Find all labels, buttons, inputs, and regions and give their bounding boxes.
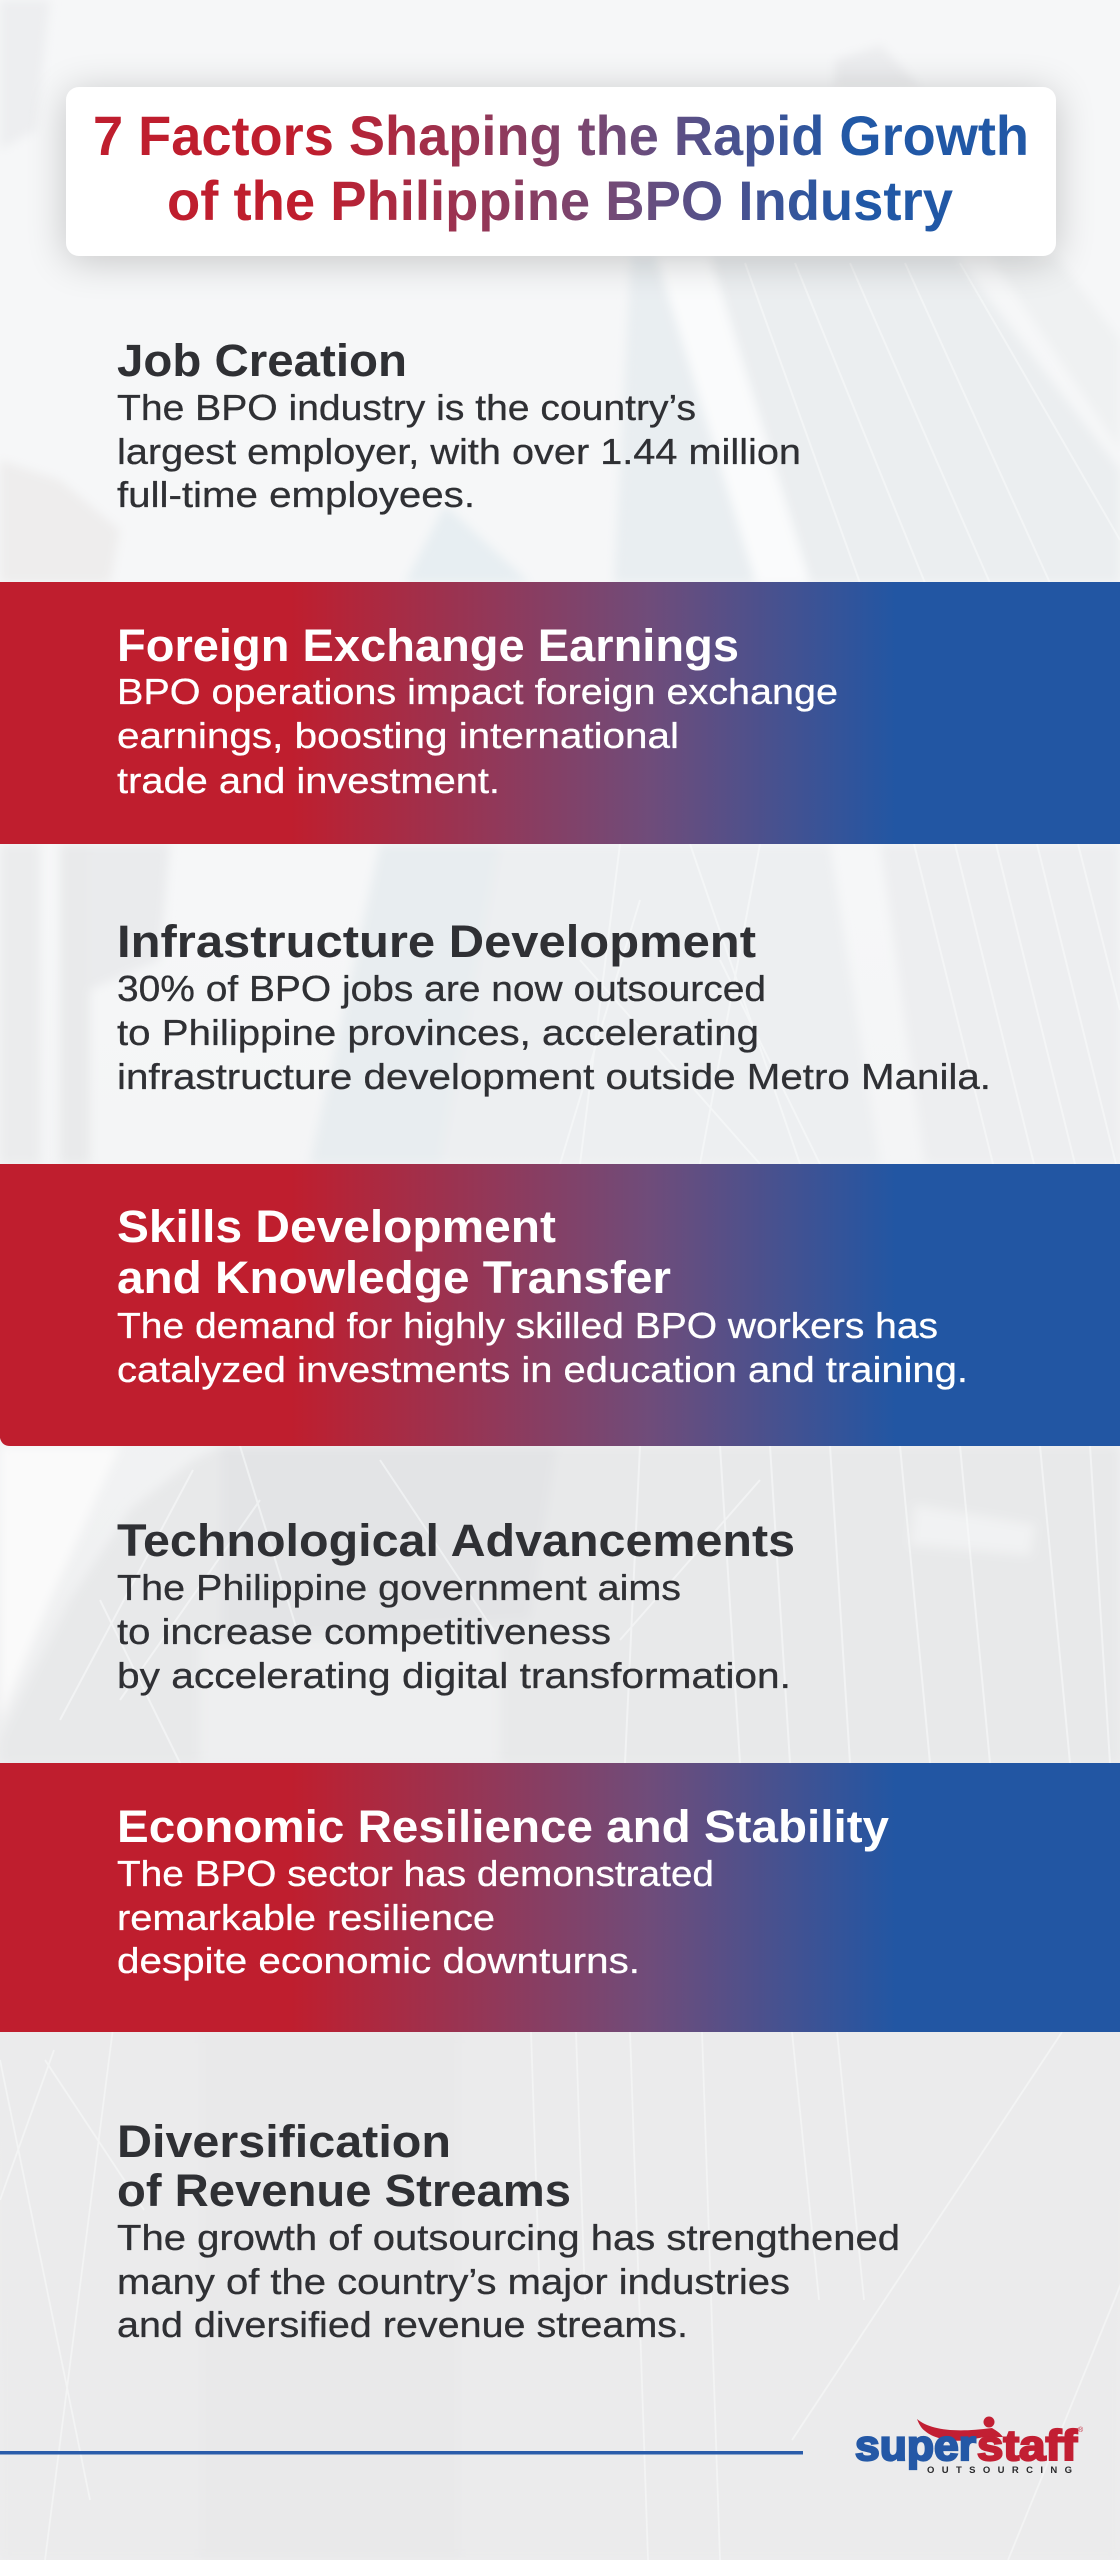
factor: infrastructure development: infrastructure development outside Metro Manila. xyxy=(117,1056,991,1097)
lower middle section buildings xyxy=(0,1446,1120,1763)
factor: diversification of revenue streams: The growth of outsourcing has strengthened xyxy=(117,2217,900,2258)
factor: diversification of revenue streams: and diversified revenue streams. xyxy=(117,2304,688,2345)
band: skills development background xyxy=(0,1164,1120,1446)
factor: diversification of revenue streams: of Revenue Streams xyxy=(117,2165,571,2216)
logo wordmark: super xyxy=(855,2422,976,2470)
factor: foreign exchange earnings: trade and investment. xyxy=(117,760,500,801)
facade lines middle xyxy=(560,844,1120,1164)
band: foreign exchange earnings background xyxy=(0,582,1120,844)
factor: technological advancements xyxy=(117,1515,795,1696)
factor: technological advancements: The Philippine government aims xyxy=(117,1567,681,1608)
middle section buildings xyxy=(0,844,40,1164)
factor: economic resilience and stability: despite economic downturns. xyxy=(117,1940,640,1981)
factor: skills development and knowledge transfer: Skills Development xyxy=(117,1201,556,1252)
factor: infrastructure development: Infrastructure Development xyxy=(117,916,756,967)
factor: infrastructure development xyxy=(117,916,991,1097)
factor: economic resilience and stability: The BPO sector has demonstrated xyxy=(117,1853,714,1894)
factor: foreign exchange earnings: BPO operations impact foreign exchange xyxy=(117,671,838,712)
factor: job creation xyxy=(117,335,801,515)
factor: foreign exchange earnings: Foreign Exchange Earnings xyxy=(117,620,739,671)
factor: diversification of revenue streams: many of the country’s major industries xyxy=(117,2261,790,2302)
factor: foreign exchange earnings: earnings, boosting international xyxy=(117,715,679,756)
factor: job creation: full-time employees. xyxy=(117,474,475,515)
top section buildings xyxy=(614,256,756,583)
factor: diversification of revenue streams xyxy=(117,2116,900,2345)
logo: SuperStaff Outsourcing: staff xyxy=(977,2422,1078,2470)
facade lines top xyxy=(745,263,1120,583)
band: economic resilience background xyxy=(0,1763,1120,2032)
factor: skills development and knowledge transfer: and Knowledge Transfer xyxy=(117,1252,671,1303)
lattice lower xyxy=(60,1446,1110,1763)
title text: of the Philippine BPO Industry xyxy=(167,169,953,232)
logo: SuperStaff Outsourcing xyxy=(855,2416,1084,2476)
factor: infrastructure development: to Philippine provinces, accelerating xyxy=(117,1012,759,1053)
logo tagline: OUTSOURCING xyxy=(927,2465,1072,2476)
bottom structure lines xyxy=(0,2032,1120,2560)
title text: 7 Factors Shaping the Rapid Growth xyxy=(93,104,1029,167)
factor: foreign exchange earnings xyxy=(117,620,838,801)
factor: economic resilience and stability: Economic Resilience and Stability xyxy=(117,1801,889,1852)
factor: skills development and knowledge transfer: The demand for highly skilled BPO workers has xyxy=(117,1305,938,1346)
logo registered mark: ® xyxy=(1078,2426,1084,2434)
factor: technological advancements: to increase competitiveness xyxy=(117,1611,611,1652)
footer rule xyxy=(0,2451,803,2454)
factor: economic resilience and stability xyxy=(117,1801,889,1981)
factor: technological advancements: by accelerating digital transformation. xyxy=(117,1655,791,1696)
factor: skills development and knowledge transfer: catalyzed investments in education and training. xyxy=(117,1349,968,1390)
factor: economic resilience and stability: remarkable resilience xyxy=(117,1897,495,1938)
bottom section xyxy=(0,2032,1120,2560)
title card xyxy=(66,87,1056,261)
factor: infrastructure development: 30% of BPO jobs are now outsourced xyxy=(117,968,766,1009)
factor: job creation: largest employer, with over 1.44 million xyxy=(117,431,801,472)
title text xyxy=(93,104,1029,232)
factor: job creation: Job Creation xyxy=(117,335,407,386)
logo swoosh and figure xyxy=(917,2416,1003,2441)
factor: diversification of revenue streams: Diversification xyxy=(117,2116,451,2167)
factor: skills development and knowledge transfer xyxy=(117,1201,968,1390)
factor: job creation: The BPO industry is the country’s xyxy=(117,387,696,428)
factor: technological advancements: Technological Advancements xyxy=(117,1515,795,1566)
